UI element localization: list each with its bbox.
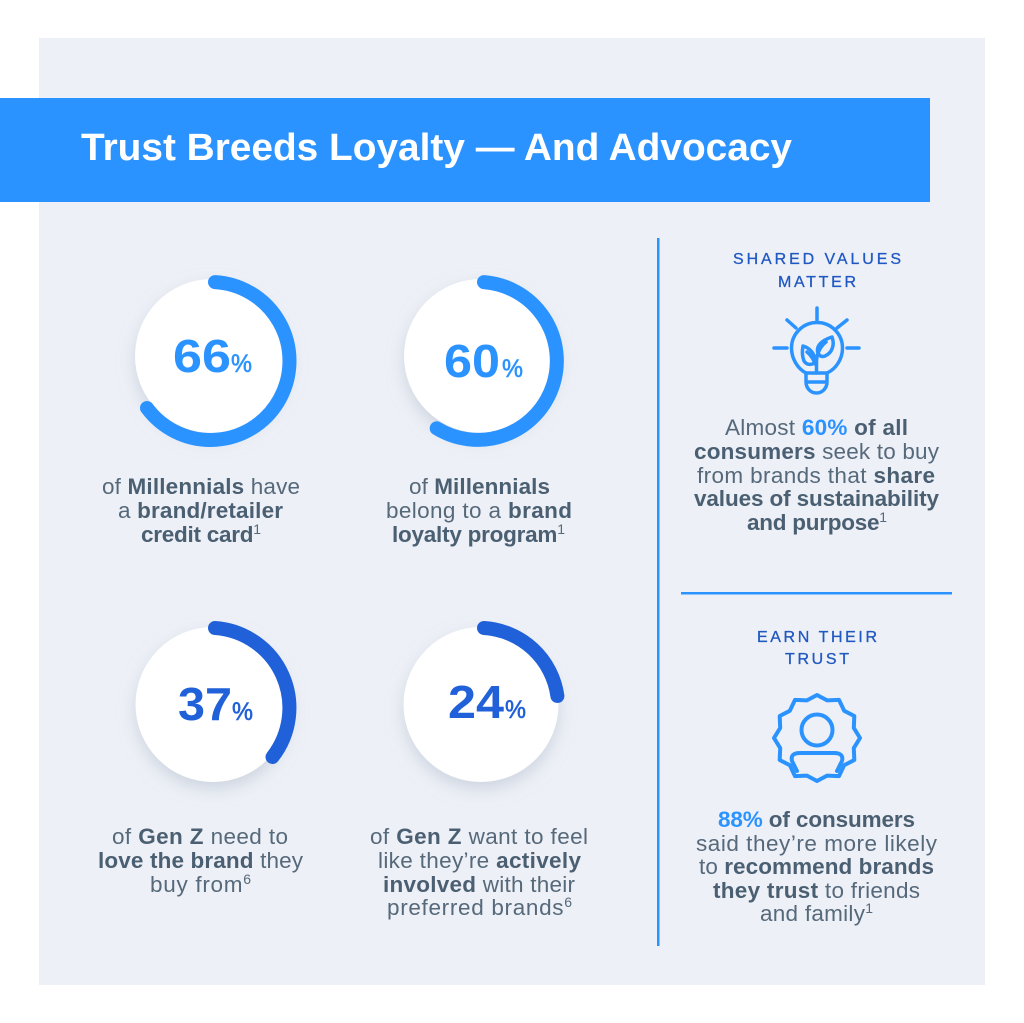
stat: 24% of Gen Z: of Gen Z want to feel [370, 824, 588, 849]
stat: 66% of Millennials: 66 [173, 330, 231, 382]
title: Trust Breeds Loyalty — And Advocacy [81, 127, 792, 169]
stat: 24% of Gen Z: like they’re actively [378, 848, 581, 873]
heading: earn their trust: TRUST [785, 651, 849, 668]
stat: 66% of Millennials: a brand/retailer [118, 498, 283, 523]
stat: 60% of Millennials: loyalty program [392, 522, 557, 547]
stat: 37% of Gen Z: 37 [178, 678, 232, 730]
text: trust stat [696, 807, 938, 926]
heading: shared values matter: MATTER [778, 274, 856, 291]
stat: 60% of Millennials: 60 [444, 335, 500, 387]
stat: 60% of Millennials: belong to a brand [386, 498, 572, 523]
stat: 37% of Gen Z: love the brand they [98, 848, 304, 873]
panel: shared values matter [694, 251, 940, 535]
stat: 24% of Gen Z [370, 627, 588, 920]
stat: 24% of Gen Z: 24 [448, 676, 504, 728]
stat: 37% of Gen Z: buy from [150, 872, 242, 897]
stat: 24% of Gen Z: involved with their [383, 872, 576, 897]
text: shared values stat: 1 [879, 509, 887, 525]
stat: 37% of Gen Z [98, 627, 304, 897]
icon: light bulb with leaves [774, 308, 859, 393]
stat: 66% of Millennials: % [231, 350, 252, 378]
stat: 24% of Gen Z: preferred brands [387, 895, 564, 920]
text: trust stat: they trust to friends [713, 878, 920, 903]
stat: 24% of Gen Z: % [505, 696, 526, 724]
text: trust stat: 1 [865, 900, 873, 916]
stat: 66% of Millennials: 1 [253, 521, 261, 537]
stat: 60% of Millennials: of Millennials [409, 474, 550, 499]
vertical divider [657, 238, 660, 946]
horizontal divider [681, 592, 952, 594]
text: shared values stat: and purpose [747, 510, 879, 535]
text: trust stat: said they’re more likely [696, 831, 938, 856]
text: shared values stat [694, 415, 940, 535]
stat: 66% of Millennials: of Millennials have [102, 474, 300, 499]
stat: 60% of Millennials [386, 279, 572, 547]
heading: earn their trust: EARN THEIR [757, 629, 877, 646]
stat: 37% of Gen Z: % [232, 698, 253, 726]
stat: 60% of Millennials: 1 [557, 521, 565, 537]
text: trust stat: and family [760, 901, 865, 926]
text: trust stat: 88% of consumers [718, 807, 915, 832]
stat: 37% of Gen Z: of Gen Z need to [112, 824, 288, 849]
panel: earn their trust [696, 629, 938, 926]
icon: person badge [774, 695, 860, 781]
heading: shared values matter: SHARED VALUES [733, 251, 901, 268]
heading: shared values matter [733, 251, 901, 291]
text: shared values stat: Almost 60% of all [725, 415, 908, 440]
stat: 66% of Millennials: credit card [141, 522, 253, 547]
text: trust stat: to recommend brands [699, 854, 934, 879]
title banner [0, 98, 930, 202]
stat: 60% of Millennials: % [502, 355, 523, 383]
text: shared values stat: consumers seek to buy [694, 439, 940, 464]
heading: earn their trust [757, 629, 877, 668]
text: shared values stat: values of sustainability [694, 486, 939, 511]
stat: 24% of Gen Z: 6 [564, 894, 572, 910]
text: shared values stat: from brands that share [697, 463, 935, 488]
stat: 66% of Millennials [102, 279, 300, 547]
stat: 37% of Gen Z: 6 [243, 871, 251, 887]
